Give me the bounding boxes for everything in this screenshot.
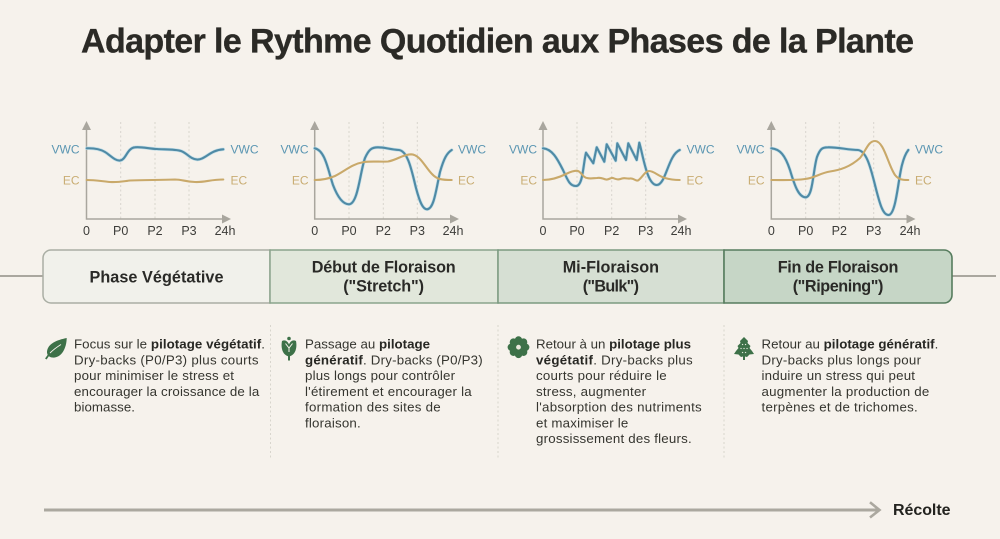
text: Retour à un pilotage plus xyxy=(536,336,691,352)
panel: végétatif description: pour minimiser le stress et xyxy=(74,368,234,383)
text: Passage au pilotage xyxy=(305,336,430,352)
panel: végétatif description: biomasse. xyxy=(74,400,135,415)
chart: phase végétative: P2 xyxy=(147,224,163,238)
chart: fin de floraison: EC xyxy=(748,174,765,188)
chart: mi-floraison: P0 xyxy=(569,224,585,238)
chart: début de floraison: EC xyxy=(292,174,309,188)
panel: végétatif description: encourager la croissance de la xyxy=(74,384,260,399)
chart: début de floraison: VWC xyxy=(458,142,486,156)
chart: fin de floraison xyxy=(736,121,943,238)
chart: début de floraison: VWC xyxy=(280,142,309,156)
panel: stretch description: génératif. Dry-backs (P0/P3) xyxy=(305,352,483,367)
title: Adapter le Rythme Quotidien aux Phases de la Plante xyxy=(81,22,914,60)
panel: végétatif description: Dry-backs (P0/P3) plus courts xyxy=(74,352,259,367)
panel: bulk description: l'absorption des nutriments xyxy=(536,400,702,415)
chart: fin de floraison: VWC xyxy=(915,142,943,156)
panel: stretch description: floraison. xyxy=(305,415,361,430)
chart: fin de floraison: 24h xyxy=(900,224,920,238)
phase: fin de floraison: Fin de Floraison xyxy=(778,258,898,276)
chart: fin de floraison: 0 xyxy=(768,224,775,238)
chart: mi-floraison: 24h xyxy=(671,224,691,238)
label: récolte: Récolte xyxy=(893,502,951,519)
chart: fin de floraison: P3 xyxy=(866,224,881,238)
panel: ripening description xyxy=(734,336,938,415)
chart: début de floraison: P3 xyxy=(410,224,425,238)
chart: fin de floraison: P0 xyxy=(798,224,813,238)
chart: début de floraison: P2 xyxy=(376,224,391,238)
phase: mi-floraison xyxy=(498,250,724,303)
panel: bulk description xyxy=(508,336,702,446)
panel: ripening description: augmenter la production de xyxy=(762,384,929,399)
phase: végétative: Phase Végétative xyxy=(90,268,224,286)
panel: stretch description: l'étirement et encourager la xyxy=(305,384,472,399)
panel: bulk description: végétatif. Dry-backs plus xyxy=(536,352,693,367)
panel: stretch description: formation des sites de xyxy=(305,400,441,415)
panel: stretch description xyxy=(282,336,483,430)
panel: ripening description: terpènes et de trichomes. xyxy=(762,400,918,415)
timeline bar xyxy=(0,250,996,303)
icon: leaf xyxy=(46,338,67,359)
phase: fin de floraison xyxy=(724,250,952,303)
icon: cone xyxy=(734,337,754,360)
phase: début de floraison: Début de Floraison xyxy=(312,258,456,276)
chart: fin de floraison: VWC xyxy=(736,142,765,156)
chart: début de floraison: 0 xyxy=(311,224,318,238)
chart: mi-floraison: EC xyxy=(686,174,704,188)
chart: phase végétative: VWC xyxy=(230,142,259,156)
chart: fin de floraison: EC xyxy=(915,174,932,188)
chart: mi-floraison: VWC xyxy=(686,142,715,156)
chart: phase végétative: VWC xyxy=(52,142,80,156)
phase: début de floraison xyxy=(270,250,498,303)
phase: mi-floraison: ("Bulk") xyxy=(583,278,639,296)
chart: phase végétative: P0 xyxy=(113,224,128,238)
chart: début de floraison: 24h xyxy=(443,224,463,238)
icon: bud xyxy=(282,337,296,360)
phase: végétative xyxy=(43,250,270,303)
chart: phase végétative: EC xyxy=(230,174,248,188)
panel: ripening description: Dry-backs plus longs pour xyxy=(762,352,922,367)
panel: bulk description: et maximiser le xyxy=(536,415,628,430)
text: Focus sur le pilotage végétatif. xyxy=(74,336,265,352)
panel: stretch description: plus longs pour contrôler xyxy=(305,368,456,383)
phase: fin de floraison: ("Ripening") xyxy=(793,278,883,296)
arrow: timeline to harvest xyxy=(44,502,880,518)
chart: phase végétative: P3 xyxy=(181,224,197,238)
chart: mi-floraison: P2 xyxy=(604,224,619,238)
text: Retour au pilotage génératif. xyxy=(762,336,938,352)
chart: phase végétative xyxy=(52,121,259,238)
panel: ripening description: induire un stress qui peut xyxy=(762,368,915,383)
chart: mi-floraison: 0 xyxy=(540,224,547,238)
chart: début de floraison xyxy=(280,121,486,238)
chart: début de floraison: P0 xyxy=(341,224,357,238)
panel: végétatif description xyxy=(46,336,265,415)
panel: bulk description: courts pour réduire le xyxy=(536,368,667,383)
chart: phase végétative: 24h xyxy=(215,224,235,238)
chart: mi-floraison xyxy=(509,121,715,238)
panel: bulk description: stress, augmenter xyxy=(536,384,647,399)
panel: bulk description: grossissement des fleurs. xyxy=(536,431,692,446)
chart: mi-floraison: VWC xyxy=(509,142,537,156)
chart: début de floraison: EC xyxy=(458,174,475,188)
chart: phase végétative: EC xyxy=(63,174,80,188)
icon: flower xyxy=(508,336,529,358)
chart: fin de floraison: P2 xyxy=(832,224,847,238)
chart: mi-floraison: P3 xyxy=(638,224,653,238)
phase: début de floraison: ("Stretch") xyxy=(343,278,424,296)
phase: mi-floraison: Mi-Floraison xyxy=(563,258,659,276)
chart: mi-floraison: EC xyxy=(520,174,537,188)
chart: phase végétative: 0 xyxy=(83,224,90,238)
